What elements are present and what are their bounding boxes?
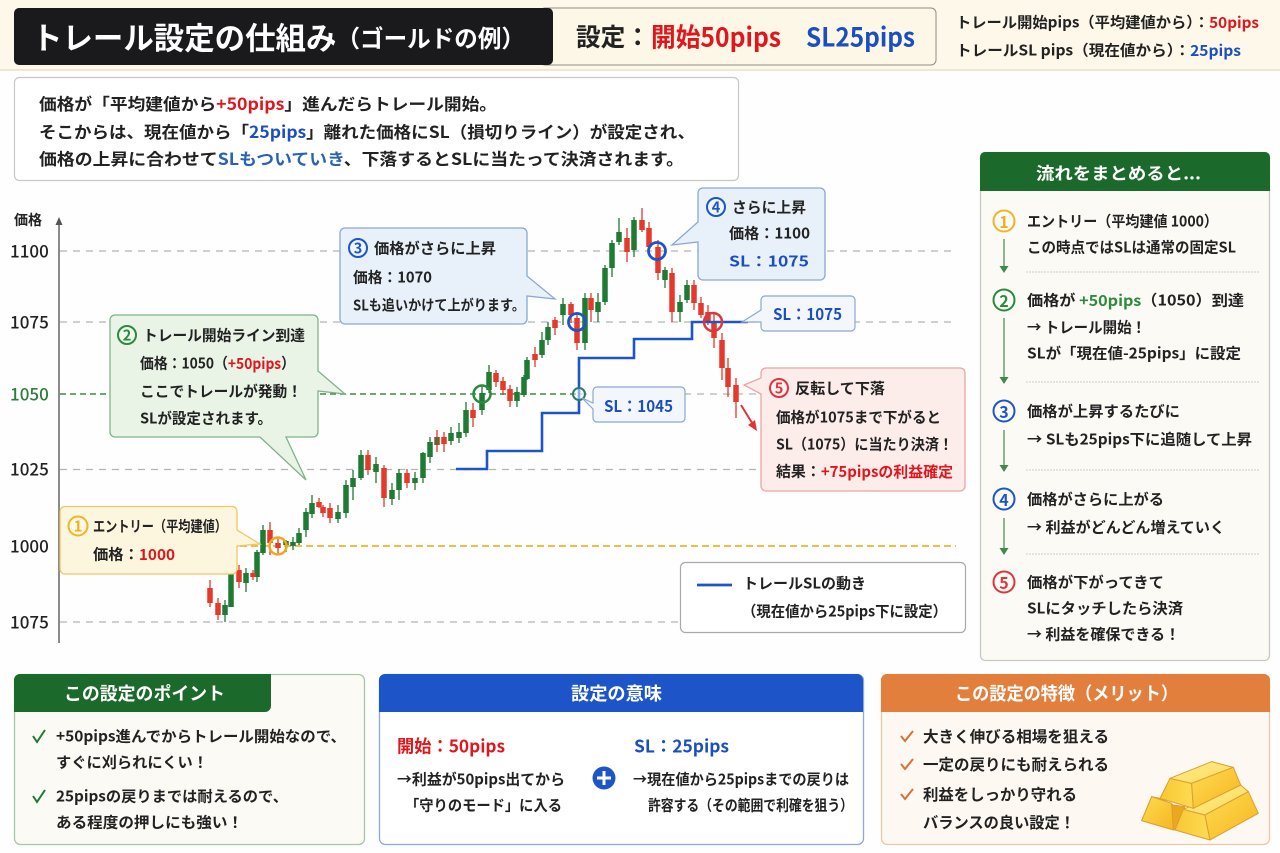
- step 2: [994, 288, 1244, 384]
- step 4: 価格がさらに上がる: [1027, 488, 1164, 510]
- callout 5 reversal: 反転して下落: [795, 378, 885, 398]
- callout 5 reversal: 結果：+75pipsの利益確定: [776, 460, 953, 482]
- settings box: 設定：: [576, 18, 650, 54]
- intro text panel: そこからは、現在値から「 25pips」離れた価格にSL（損切りライン）が設定され、: [39, 119, 695, 143]
- point 1: +50pips進んでからトレール開始なので、: [56, 726, 346, 746]
- step 2: 価格が +50pips （1050）到達: [1027, 290, 1244, 310]
- callout 3 price rises: 価格がさらに上昇: [374, 238, 496, 258]
- callout 1 entry: 1: [74, 516, 82, 536]
- callout 3 price rises: SLも追いかけて上がります。: [353, 294, 525, 316]
- step 3: 価格が上昇するたびに: [1027, 400, 1180, 422]
- merit list: バランスの良い設定！: [923, 811, 1075, 833]
- icon: gold bars: [1142, 762, 1258, 840]
- legend: （現在値から25pips下に設定）: [742, 600, 947, 622]
- panel: meaning of settings: [379, 674, 864, 844]
- header summary: トレールSL pips（現在値から）： 25pips: [956, 40, 1241, 60]
- marker: top price: [648, 242, 666, 260]
- panel heading: 設定の意味: [571, 680, 662, 706]
- y axis: 1050: [10, 380, 49, 406]
- step 4: [994, 487, 1225, 555]
- callout 2 trail start: トレール開始ライン到達: [143, 324, 305, 346]
- header summary: トレール開始pips（平均建値から）： 50pips: [956, 12, 1259, 32]
- marker: rising price: [568, 314, 586, 330]
- step 5: [994, 570, 1183, 644]
- marker: trail start: [474, 386, 490, 402]
- merit list: [901, 725, 1109, 833]
- marker: entry: [270, 538, 286, 554]
- 1050 trail start line: [60, 393, 580, 395]
- 1000 entry line: [240, 545, 956, 547]
- panel heading: 流れをまとめると...: [1036, 160, 1201, 184]
- trailing SL step line: [456, 322, 748, 469]
- callout 1 entry: 価格：1000: [93, 544, 175, 564]
- point 1: すぐに刈られにくい！: [56, 752, 208, 772]
- panel: merits: [881, 674, 1270, 844]
- y axis: 1100: [10, 238, 49, 262]
- SL setting: SL：25pips: [634, 734, 729, 758]
- y axis: 1075: [10, 308, 49, 334]
- point 2: 25pipsの戻りまでは耐えるので、: [56, 786, 288, 806]
- panel heading: [881, 674, 1270, 712]
- merit list: 利益をしっかり守れる: [923, 783, 1077, 805]
- SL setting: →現在値から25pipsまでの戻りは: [633, 768, 849, 790]
- step 2: 2: [999, 288, 1009, 312]
- step 3: [994, 399, 1252, 472]
- point 1: [33, 726, 346, 772]
- intro text panel: [14, 78, 738, 180]
- settings box: [540, 8, 936, 65]
- panel heading: この設定のポイント: [64, 680, 225, 706]
- callout 2 trail start: ここでトレールが発動！: [140, 380, 302, 402]
- intro text panel: 価格が「平均建値から +50pips 」進んだらトレール開始。: [39, 91, 497, 115]
- callout 4 further rise: 4: [712, 196, 721, 218]
- label SL 1075: SL：1075: [773, 301, 842, 325]
- label SL 1045: SL：1045: [604, 393, 673, 417]
- legend: [680, 562, 966, 632]
- step 1: この時点ではSLは通常の固定SL: [1027, 236, 1236, 258]
- step 1: [994, 209, 1236, 273]
- start setting: →利益が50pips出てから: [397, 768, 565, 790]
- panel: key points: [14, 674, 364, 844]
- callout 3 price rises: 価格：1070: [353, 266, 432, 288]
- label SL 1075: [742, 296, 855, 331]
- panel heading: [14, 674, 271, 712]
- step 5: 5: [999, 570, 1009, 594]
- panel heading: [980, 152, 1270, 191]
- y axis: 1000: [10, 532, 49, 558]
- merit list: 大きく伸びる相場を狙える: [923, 725, 1109, 747]
- y axis: 1025: [10, 456, 49, 480]
- step 3: → SLも25pips下に追随して上昇: [1027, 428, 1252, 450]
- legend: トレールSLの動き: [743, 572, 866, 594]
- step 4: → 利益がどんどん増えていく: [1027, 516, 1225, 538]
- SL setting: [633, 734, 853, 816]
- panel heading: この設定の特徴（メリット）: [955, 680, 1178, 706]
- settings box: 開始50pips: [651, 18, 781, 54]
- callout 2 trail start: SLが設定されます。: [140, 408, 272, 428]
- callout 4 further rise: SL：1075: [729, 250, 809, 272]
- step 3: 3: [999, 399, 1009, 423]
- step 2: → トレール開始！: [1027, 316, 1146, 338]
- title: トレール設定の仕組み（ゴールドの例）: [32, 14, 525, 58]
- y axis: 価格: [14, 210, 42, 230]
- callout 4 further rise: さらに上昇: [732, 196, 806, 218]
- callout 2 trail start: 2: [123, 324, 131, 346]
- step 1: エントリー（平均建値 1000）: [1027, 210, 1218, 232]
- marker: SL 1045: [573, 388, 585, 400]
- point 2: ある程度の押しにも強い！: [56, 812, 243, 832]
- callout 3 price rises: 3: [354, 238, 362, 258]
- step 1: 1: [999, 209, 1009, 233]
- marker: stop hit: [704, 313, 722, 331]
- start setting: 開始：50pips: [397, 734, 505, 758]
- callout 5 reversal: 5: [775, 378, 783, 398]
- merit list: 一定の戻りにも耐えられる: [923, 753, 1109, 775]
- callout 1 entry: [60, 506, 260, 574]
- callout 2 trail start: 価格：1050（+50pips）: [140, 352, 295, 374]
- arrow: falling price: [741, 405, 757, 431]
- intro text panel: 価格の上昇に合わせて SLもついていき 、下落するとSLに当たって決済されます。: [39, 146, 684, 170]
- start setting: 「守りのモード」に入る: [405, 794, 562, 816]
- header band: [0, 0, 1280, 71]
- y axis: 1075: [10, 608, 49, 634]
- step 5: SLにタッチしたら決済: [1027, 598, 1183, 618]
- price chart: [10, 208, 956, 643]
- icon: plus: [592, 766, 616, 790]
- settings box: SL25pips: [806, 18, 915, 54]
- start setting: [397, 734, 565, 816]
- header summary: [956, 12, 1259, 60]
- callout 2 trail start: [110, 315, 345, 480]
- callout 4 further rise: 価格：1100: [729, 222, 810, 244]
- panel heading: [379, 674, 863, 712]
- callout 1 entry: エントリー（平均建値）: [93, 516, 227, 536]
- step 2: SLが「現在値-25pips」に設定: [1027, 342, 1241, 364]
- callout 5 reversal: SL（1075）に当たり決済！: [776, 434, 953, 454]
- label SL 1045: [582, 387, 685, 422]
- panel: flow summary: [980, 152, 1270, 660]
- candlesticks: [210, 208, 736, 622]
- SL setting: 許容する（その範囲で利確を狙う）: [648, 794, 853, 816]
- callout 3 price rises: [340, 228, 555, 324]
- step 4: 4: [999, 487, 1009, 511]
- step 5: 価格が下がってきて: [1027, 572, 1164, 592]
- y axis: [10, 210, 62, 643]
- point 2: [33, 786, 288, 832]
- callout 5 reversal: [744, 368, 965, 491]
- callout 4 further rise: [672, 188, 825, 280]
- step 5: → 利益を確保できる！: [1027, 624, 1180, 644]
- callout 5 reversal: 価格が1075まで下がると: [776, 406, 941, 428]
